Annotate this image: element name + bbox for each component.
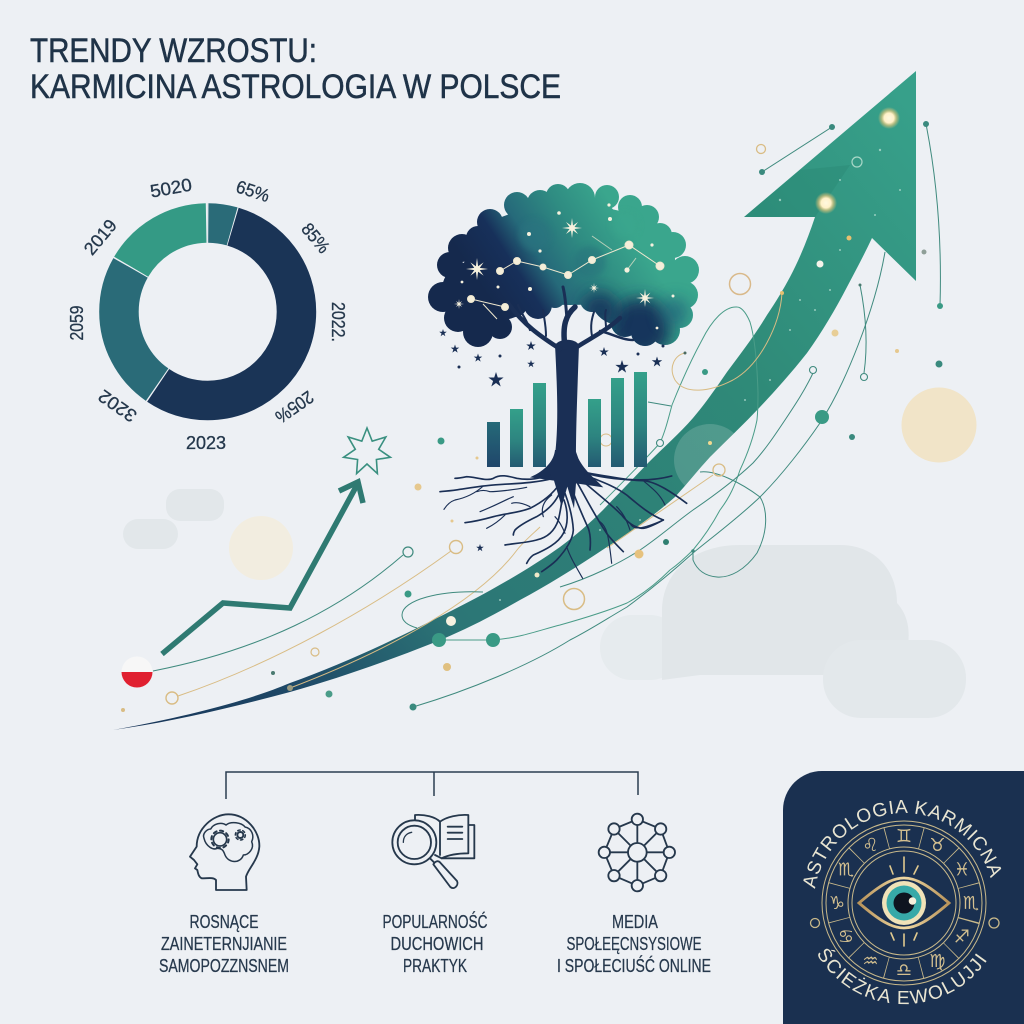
zodiac glyphs: ♓︎ [954,860,970,880]
zodiac glyphs: ♒︎ [862,951,879,972]
zodiac glyphs: ♏︎ [838,860,854,880]
label: popularnosc: DUCHOWICH [390,934,484,954]
label: rosnace: ZAINETERNJIANIE [161,934,287,954]
zodiac glyphs: ♌︎ [862,835,879,856]
tree [428,183,699,578]
main growth arrow [113,71,916,730]
zodiac wheel [822,821,986,985]
scatter dots [121,121,943,712]
icon: magnifier and book [392,815,474,888]
background clouds and soft circles [123,388,976,718]
title: KARMICINA ASTROLOGIA W POLSCE [30,68,561,106]
zodiac glyphs: ♊︎ [896,826,912,847]
constellations [468,236,664,319]
donut labels [67,175,348,453]
donut labels: 2059 [67,306,87,340]
zodiac glyphs: ♍︎ [929,951,946,972]
zodiac glyphs: ♎︎ [896,960,912,981]
zodiac glyphs [829,826,979,981]
tree trunk and branches [508,287,633,455]
label: media: MEDIA [612,912,658,932]
label: popularnosc: POPULARNOŚĆ [382,911,488,932]
badge: astrologia karmiczna [783,771,1024,1024]
donut labels: 2022. [328,302,348,342]
label: popularnosc [382,911,488,976]
label: media [557,912,711,976]
donut labels: 5020 [149,175,193,202]
zodiac glyphs: ♑︎ [829,893,845,914]
icon: polish flag [122,656,152,688]
donut labels: 205% [272,387,317,427]
crown shading [520,236,694,346]
donut labels: 65% [234,177,272,206]
label: media: I SPOŁECIUŚĆ ONLINE [557,955,711,976]
donut labels: 2023 [186,433,226,453]
badge circular text bottom: ŚCIEŻKA EWOLUJJI [818,948,986,1004]
label: popularnosc: PRAKTYK [403,956,467,976]
tree crown [428,183,699,347]
small rising arrow [162,482,363,654]
crown sparkles [454,203,674,329]
title [30,32,561,106]
falling stars [439,329,664,386]
label: rosnace [159,912,289,976]
icon: network [599,814,675,891]
small side ornaments [810,918,999,928]
donut labels: 2019 [80,215,121,259]
donut chart [119,223,296,400]
label: media: SPOŁEĘCNSYSIOWE [566,934,702,954]
connecting lines [153,124,940,707]
title: TRENDY WZROSTU: [30,32,317,70]
connector bracket [226,772,638,799]
zodiac glyphs: ♏︎ [963,893,979,914]
zodiac glyphs: ♋︎ [838,926,854,948]
badge circular text top: ASTROLOGIA KARMICNA [803,800,1002,889]
label: rosnace: SAMOPOZZNSNEM [159,956,289,976]
icon: seven-pointed star [344,428,390,474]
zodiac glyphs: ♉︎ [929,835,946,856]
bar charts beside tree [487,372,647,467]
zodiac glyphs: ♐︎ [954,926,970,948]
donut labels: 3202 [95,386,140,426]
label: rosnace: ROSNĄCE [190,912,258,932]
donut labels: 85% [297,219,334,257]
tree roots [440,450,687,578]
eye icon [859,857,949,946]
icon: head with gears [190,814,259,890]
